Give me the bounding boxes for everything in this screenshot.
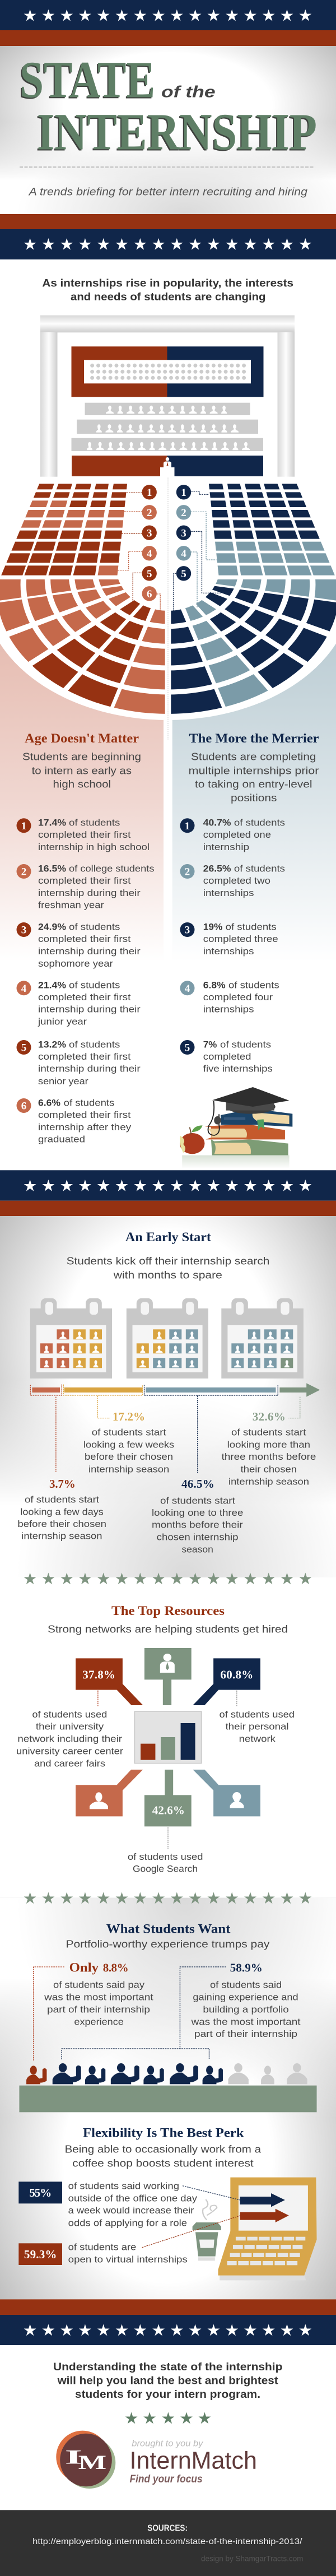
stat 3: sophomore year (38, 958, 113, 969)
stat 3 (17, 921, 141, 969)
icon: calendar two (127, 1298, 208, 1378)
chart: chamber seating (0, 461, 336, 740)
stat 46.5 percent: of students start (160, 1495, 235, 1506)
stat 1: 17.4% (38, 817, 66, 828)
stat 3.7 percent: before their chosen (17, 1519, 106, 1529)
stat 37.8 percent: 37.8% (82, 1668, 115, 1682)
stat 5: of students (69, 1039, 120, 1050)
stat 4 (17, 980, 141, 1027)
stat 37.8 percent: and career fairs (34, 1758, 105, 1769)
stat five internships (180, 1039, 273, 1074)
stat 58.9 percent: of students said (210, 1980, 282, 1990)
stat one internship: 40.7% (203, 817, 231, 828)
icon: books, cap and apple (180, 1087, 292, 1169)
stat 37.8 percent: network including their (17, 1734, 122, 1744)
stat 42.6 percent: Google Search (133, 1864, 198, 1874)
footer: sources: design by ShamgarTracts.com (201, 2555, 304, 2563)
stat 3.7 percent: looking a few days (20, 1506, 104, 1517)
resource shapes (76, 1648, 260, 1849)
timeline arrow (30, 1383, 320, 1474)
stat 55 percent: 55% (29, 2186, 52, 2199)
stat five internships: 5 (185, 1042, 190, 1054)
legend circles: 4 (181, 548, 186, 560)
five stars (125, 2412, 211, 2424)
stat 1: 1 (21, 820, 26, 832)
stat 58.9 percent: was the most important (191, 2016, 301, 2027)
stat 32.6 percent: 32.6% (253, 1410, 286, 1423)
stat only 8.8 percent: was the most important (44, 1992, 153, 2002)
stat three internships: internships (203, 946, 254, 957)
logo: internmatch: brought to you by (132, 2439, 203, 2449)
stat 32.6 percent: internship season (228, 1476, 309, 1487)
stat three internships: 3 (185, 925, 190, 936)
footer: sources: http://employerblog.internmatch.com/state-of-the-internship-2013/ (32, 2537, 303, 2546)
stat only 8.8 percent: Only (69, 1960, 99, 1974)
stat 55 percent: a week would increase their (68, 2205, 194, 2216)
stat 59.3 percent: 59.3% (24, 2248, 57, 2261)
stat 46.5 percent (152, 1477, 243, 1555)
stat three internships: of students (226, 921, 277, 932)
stat 5: senior year (38, 1076, 88, 1087)
panel: age doesn't matter heading (22, 731, 141, 790)
stat four internships: completed four (203, 992, 273, 1002)
stat one internship: 1 (185, 820, 190, 832)
heading: the top resources (48, 1604, 288, 1635)
stat two internships: completed two (203, 875, 270, 886)
students raising hands (19, 1967, 317, 2112)
stat one internship (180, 817, 285, 852)
stat 1: completed their first (38, 829, 131, 840)
heading: the top resources: Strong networks are helping students get hired (48, 1623, 288, 1635)
closing statement (53, 2361, 282, 2401)
heading: with months to spare (113, 1269, 222, 1281)
stat 3: completed their first (38, 934, 131, 944)
panel: an early start (0, 1216, 336, 1577)
leader lines (118, 491, 221, 611)
stat only 8.8 percent: experience (74, 2016, 124, 2027)
heading: what students want: Portfolio-worthy experience trumps pay (66, 1938, 270, 1950)
intro heading: and needs of students are changing (71, 291, 265, 303)
logo mark: I (65, 2446, 82, 2468)
panel: age doesn't matter heading: Age Doesn't Matter (25, 731, 139, 745)
stat 1: of students (69, 817, 120, 828)
stat four internships: 6.8% (203, 980, 226, 990)
stat one internship: of students (234, 817, 285, 828)
stat 46.5 percent: months before their (152, 1520, 243, 1530)
stat three internships: completed three (203, 934, 278, 944)
star divider (24, 1572, 311, 1584)
stat 58.9 percent: building a portfolio (203, 2004, 289, 2015)
stat 37.8 percent: their university (36, 1721, 104, 1732)
stat 60.8 percent (220, 1668, 295, 1744)
heading: flexibility is the best perk (65, 2125, 262, 2169)
stat 59.3 percent (18, 2242, 188, 2265)
heading: what students want (66, 1921, 270, 1950)
stat 1 (17, 817, 150, 852)
stat two internships: internships (203, 888, 254, 898)
legend circles: 5 (147, 568, 152, 580)
logo: internmatch (56, 2431, 257, 2489)
heading: flexibility is the best perk: Being able to occasionally work from a (65, 2143, 262, 2155)
stat only 8.8 percent: part of their internship (47, 2004, 150, 2015)
stat two internships: of students (234, 863, 285, 874)
stat 58.9 percent (191, 1961, 301, 2039)
stat 4: junior year (38, 1016, 87, 1027)
stat 32.6 percent: looking more than (227, 1439, 310, 1450)
stat 3.7 percent (17, 1477, 106, 1542)
stat 17.2 percent (83, 1410, 174, 1474)
panel: age doesn't matter heading: Students are beginning (22, 751, 141, 763)
legend circles: 1 (147, 487, 152, 499)
logo mark (56, 2431, 115, 2489)
stat 32.6 percent (222, 1410, 316, 1487)
heading: An Early Start (125, 1230, 211, 1244)
stat 37.8 percent: university career center (16, 1746, 123, 1757)
stat four internships (180, 980, 279, 1015)
stat only 8.8 percent: 8.8% (103, 1961, 129, 1974)
stat 3.7 percent: 3.7% (49, 1477, 76, 1491)
panel: the more the merrier heading: positions (231, 792, 277, 804)
stat two internships: 2 (185, 866, 190, 878)
stat 6 (17, 1097, 132, 1145)
stat 5: 5 (21, 1042, 26, 1054)
stat 55 percent: outside of the office one day (68, 2193, 198, 2203)
stat 3: of students (69, 921, 120, 932)
stat 32.6 percent: of students start (231, 1427, 306, 1438)
stat three internships (180, 921, 278, 957)
heading: flexibility is the best perk: coffee shop boosts student interest (72, 2157, 254, 2169)
title: of the (161, 83, 216, 101)
heading: Students kick off their internship search (67, 1255, 269, 1267)
lower title banner (0, 214, 336, 259)
stat only 8.8 percent: of students said pay (53, 1980, 145, 1990)
panel: the more the merrier heading (189, 731, 319, 804)
stat 2: of college students (69, 863, 155, 874)
stat 55 percent: odds of applying for a role (68, 2217, 187, 2228)
panel: age doesn't matter heading: high school (53, 778, 111, 790)
intro heading: As internships rise in popularity, the interests (42, 278, 293, 290)
stat 5: 13.2% (38, 1039, 66, 1050)
stat 1: internship in high school (38, 842, 150, 852)
stat two internships (180, 863, 285, 898)
stat 17.2 percent: 17.2% (113, 1410, 145, 1423)
legend circles: 3 (147, 527, 152, 539)
stat three internships: 19% (203, 921, 222, 932)
logo: internmatch: InternMatch (130, 2447, 257, 2475)
logo mark: M (78, 2451, 106, 2473)
stat 6: of students (64, 1097, 114, 1108)
stat 42.6 percent: of students used (128, 1851, 203, 1862)
stat 5: internship during their (38, 1064, 141, 1074)
stat 5 (17, 1039, 141, 1087)
stat five internships: five internships (203, 1064, 273, 1074)
stat 58.9 percent: part of their internship (194, 2029, 297, 2039)
logo: internmatch: Find your focus (130, 2473, 203, 2485)
panel: the more the merrier heading: to taking on entry-level (195, 778, 312, 790)
legend circles: 4 (147, 548, 152, 560)
stat 6: 6 (21, 1101, 26, 1112)
stat 17.2 percent: before their chosen (85, 1451, 173, 1462)
diagram: top resources (16, 1648, 295, 1874)
legend circles: 3 (181, 527, 186, 539)
stat 46.5 percent: chosen internship (157, 1531, 239, 1542)
intro heading (42, 278, 293, 303)
legend circles: 1 (181, 487, 186, 499)
heading: flexibility is the best perk: Flexibility Is The Best Perk (83, 2125, 244, 2139)
title: STATE (20, 51, 155, 109)
panel: age doesn't matter heading: to intern as early as (32, 765, 132, 777)
title panel (0, 46, 336, 214)
stat 55 percent (18, 2181, 198, 2228)
stat 46.5 percent: looking one to three (152, 1507, 243, 1518)
stat 37.8 percent (16, 1668, 123, 1769)
footer: sources: SOURCES: (147, 2524, 188, 2533)
stat 58.9 percent: 58.9% (230, 1961, 263, 1974)
left seat rows (0, 482, 165, 576)
stat 6: completed their first (38, 1110, 131, 1120)
stat 2: internship during their (38, 888, 141, 898)
stat 37.8 percent: of students used (32, 1709, 107, 1720)
stat 3.7 percent: internship season (21, 1531, 102, 1542)
icon: laptop and coffee cup (142, 2178, 317, 2280)
list: internship count statistics (180, 817, 285, 1074)
stat 3: internship during their (38, 946, 141, 957)
stat two internships: 26.5% (203, 863, 231, 874)
stat 32.6 percent: their chosen (241, 1464, 297, 1474)
stat 60.8 percent: their personal (226, 1721, 289, 1732)
heading: what students want: What Students Want (106, 1921, 231, 1936)
legend circles (142, 485, 191, 601)
stat five internships: 7% (203, 1039, 217, 1050)
building (40, 315, 295, 477)
stat 17.2 percent: looking a few weeks (83, 1439, 174, 1450)
panel backgrounds behind the chamber (0, 643, 336, 962)
stat four internships: 4 (185, 983, 190, 995)
stat 4: 4 (21, 983, 27, 995)
list: age statistics (17, 817, 155, 1145)
title (20, 51, 317, 161)
stat 58.9 percent: gaining experience and (193, 1992, 298, 2002)
speaker podium (72, 456, 263, 477)
stat 42.6 percent: 42.6% (152, 1803, 185, 1817)
stat one internship: completed one (203, 829, 271, 840)
legend circles: 2 (181, 507, 186, 519)
stat 3: 24.9% (38, 921, 66, 932)
stat 4: of students (69, 980, 120, 990)
stat 32.6 percent: three months before (222, 1451, 316, 1462)
closing statement: will help you land the best and brightest (57, 2375, 278, 2387)
stat 3: 3 (21, 925, 26, 936)
stat one internship: internship (203, 842, 249, 852)
closing statement: students for your intern program. (75, 2389, 260, 2401)
subtitle: A trends briefing for better intern recruiting and hiring (29, 186, 307, 198)
heading (67, 1230, 269, 1281)
stat 46.5 percent: season (181, 1544, 213, 1555)
audience rows (72, 403, 263, 451)
stat 6: 6.6% (38, 1097, 60, 1108)
stat 17.2 percent: of students start (92, 1427, 166, 1438)
footer: sources (0, 2510, 336, 2576)
legend circles: 5 (181, 568, 186, 580)
stat 4: 21.4% (38, 980, 66, 990)
legend circles: 2 (147, 507, 152, 519)
stat 60.8 percent: 60.8% (220, 1668, 253, 1682)
legend circles: 6 (147, 588, 152, 600)
stat 2: 2 (21, 866, 26, 878)
flag banner (72, 346, 263, 397)
bottom banner (0, 2299, 336, 2345)
panel: the more the merrier heading: Students are completing (191, 751, 316, 763)
stat 5: completed their first (38, 1051, 131, 1062)
stat 2: freshman year (38, 900, 104, 911)
stat only 8.8 percent (44, 1960, 153, 2027)
icon: calendar one (30, 1298, 112, 1378)
stat 2: 16.5% (38, 863, 66, 874)
stat five internships: of students (220, 1039, 271, 1050)
stat 60.8 percent: network (239, 1734, 276, 1744)
stat 4: completed their first (38, 992, 131, 1002)
panel: what students want and flexibility (0, 1892, 336, 2299)
closing statement: Understanding the state of the internship (53, 2361, 282, 2373)
panel: the more the merrier heading: multiple internships prior (189, 765, 319, 777)
stat 59.3 percent: of students are (68, 2242, 136, 2253)
stat 6: internship after they (38, 1122, 132, 1132)
stat 46.5 percent: 46.5% (181, 1477, 214, 1491)
panel: the more the merrier heading: The More the Merrier (189, 731, 319, 745)
section banner: early start (0, 1170, 336, 1216)
stat 60.8 percent: of students used (220, 1709, 295, 1720)
stat 55 percent: of students said working (68, 2181, 179, 2192)
stat 2: completed their first (38, 875, 131, 886)
heading: the top resources: The Top Resources (111, 1604, 225, 1618)
stat 42.6 percent (128, 1803, 203, 1874)
top banner (0, 0, 336, 46)
icon: calendar three (221, 1298, 304, 1378)
stat 4: internship during their (38, 1004, 141, 1015)
stat 17.2 percent: internship season (88, 1464, 169, 1474)
right seat rows (171, 482, 336, 576)
stat 6: graduated (38, 1134, 85, 1145)
stat 3.7 percent: of students start (25, 1494, 99, 1505)
stat four internships: of students (228, 980, 279, 990)
stat 59.3 percent: open to virtual internships (68, 2254, 188, 2265)
stat five internships: completed (203, 1051, 251, 1062)
stat four internships: internships (203, 1004, 254, 1015)
stat 2 (17, 863, 155, 911)
